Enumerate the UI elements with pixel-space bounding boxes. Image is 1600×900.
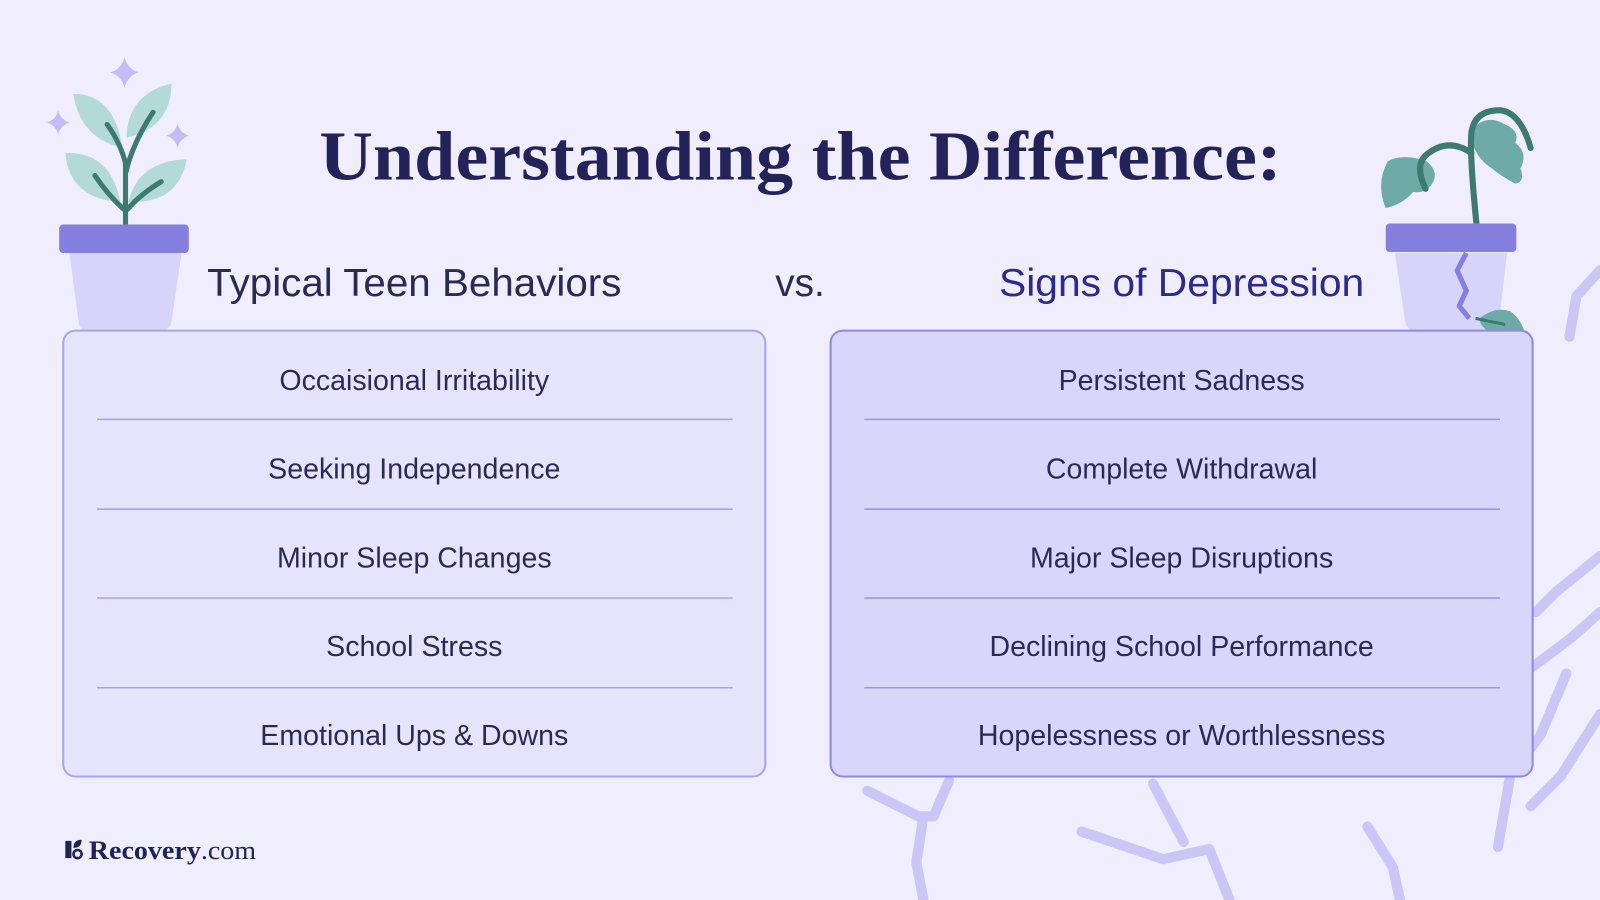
subheading left: Typical Teen Behaviors bbox=[207, 262, 621, 305]
subheading right: Signs of Depression bbox=[999, 262, 1364, 305]
panel: signs of depression: Persistent Sadness bbox=[1059, 365, 1305, 397]
vs label: vs. bbox=[775, 262, 825, 305]
icon: healthy plant bbox=[47, 57, 189, 332]
panel: typical teen behaviors: Emotional Ups & Downs bbox=[260, 720, 568, 752]
panel: typical teen behaviors bbox=[63, 331, 765, 777]
logo: Recovery.com bbox=[89, 835, 257, 865]
panel: typical teen behaviors: Minor Sleep Changes bbox=[277, 542, 552, 574]
title: Understanding the Difference: bbox=[319, 119, 1282, 196]
panel: typical teen behaviors: Occaisional Irritability bbox=[279, 365, 550, 397]
panel: signs of depression: Declining School Performance bbox=[990, 631, 1374, 663]
panel: typical teen behaviors: School Stress bbox=[326, 631, 502, 663]
decorative cracks background bbox=[867, 270, 1600, 900]
panel: signs of depression: Complete Withdrawal bbox=[1046, 454, 1317, 486]
panel: signs of depression: Hopelessness or Worthlessness bbox=[978, 720, 1385, 752]
icon: wilting plant bbox=[1381, 110, 1531, 332]
panel: signs of depression bbox=[831, 331, 1533, 777]
panel: signs of depression: Major Sleep Disruptions bbox=[1030, 542, 1333, 574]
panel: typical teen behaviors: Seeking Independence bbox=[268, 454, 560, 486]
